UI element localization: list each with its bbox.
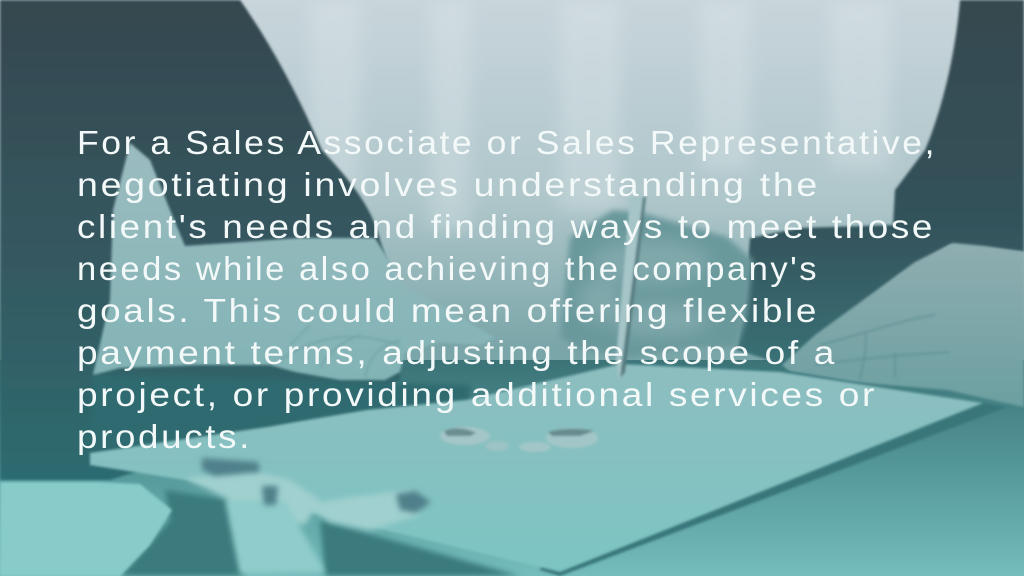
body text: products. [77,419,252,456]
photo: bottom-left paper [0,482,172,576]
photo: dark shadow under the fist [90,375,470,453]
body text: negotiating involves understanding the [77,167,820,204]
photo: highlights on centre hand [578,240,710,336]
photo: table surface [0,360,1024,576]
body text: project, or providing additional services or [77,377,877,414]
body text [77,125,937,456]
body text: For a Sales Associate or Sales Representative, [77,125,937,162]
photo: dark objects on the desk [202,458,431,513]
photo: pen [616,197,646,380]
photo: dark desk shadow lower left [120,490,520,576]
photo: left forearm and fist [93,143,495,380]
photo: left person suit [0,0,400,480]
photo: light object scraps [185,470,420,574]
body text: client's needs and finding ways to meet those [77,209,935,246]
photo: paper document shadow edge [540,362,1007,576]
photo: centre hand holding pen [560,210,753,358]
photo: paper document [90,364,983,572]
body text: needs while also achieving the company's [77,251,819,288]
body text: payment terms, adjusting the scope of a [77,335,837,372]
photo: finger creases [815,315,950,380]
photo: toy car left [440,427,509,451]
body text: goals. This could mean offering flexible [77,293,819,330]
photo: knuckle creases [280,325,400,378]
photo: toy car right [519,428,598,452]
photo: right hand [782,243,1024,407]
photo: right person suit and sleeve [737,0,1024,365]
